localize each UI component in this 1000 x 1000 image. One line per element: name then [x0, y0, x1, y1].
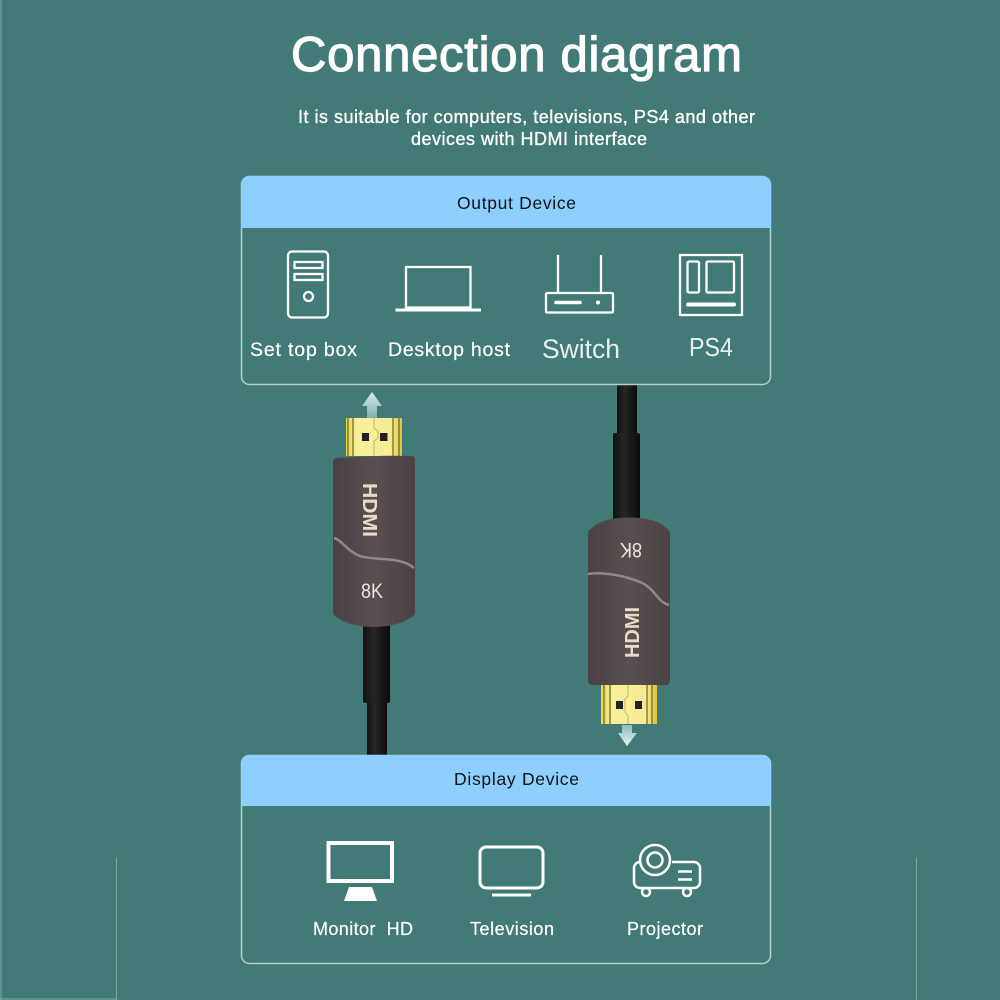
subtitle text: It is suitable for computers, televisions, PS4 and other [298, 107, 755, 127]
icon: switch router [546, 255, 613, 312]
8K label: 8K [620, 538, 642, 561]
label: television: Television [470, 919, 554, 939]
arrow: up to output device [362, 392, 382, 418]
output device header [241, 176, 771, 228]
connector body [588, 518, 670, 685]
title: Connection diagram [291, 28, 742, 82]
arrow: down to display device [618, 725, 637, 746]
panel: output device [241, 176, 771, 384]
icon: desktop host laptop [396, 267, 481, 310]
left cable [363, 620, 390, 755]
icon: set top box [288, 252, 328, 318]
connector body [333, 456, 415, 627]
icon: projector [634, 845, 700, 896]
right cable [613, 385, 640, 523]
8K label: 8K [361, 580, 383, 603]
label: desktop host: Desktop host [388, 339, 511, 361]
HDMI label: HDMI [622, 607, 644, 658]
HDMI label: HDMI [358, 483, 380, 537]
display device header [241, 755, 771, 806]
label: PS4: PS4 [689, 332, 733, 362]
display device header: Display Device [454, 769, 579, 789]
panel: display device [241, 755, 771, 964]
label: set top box: Set top box [250, 339, 357, 361]
output device header: Output Device [457, 193, 576, 213]
body highlight curve [334, 538, 414, 568]
icon: monitor [328, 843, 392, 901]
left HDMI connector [333, 392, 415, 627]
subtitle text: devices with HDMI interface [411, 129, 647, 149]
label: monitor HD: Monitor HD [313, 919, 413, 939]
gold plug [346, 418, 402, 456]
right HDMI connector [588, 518, 670, 746]
icon: television [480, 847, 543, 895]
subtitle text [298, 107, 755, 149]
gold plug [601, 685, 657, 724]
label: switch: Switch [542, 334, 620, 364]
body highlight curve [588, 573, 669, 605]
label: projector: Projector [627, 919, 703, 939]
icon: PS4 console [680, 255, 742, 315]
